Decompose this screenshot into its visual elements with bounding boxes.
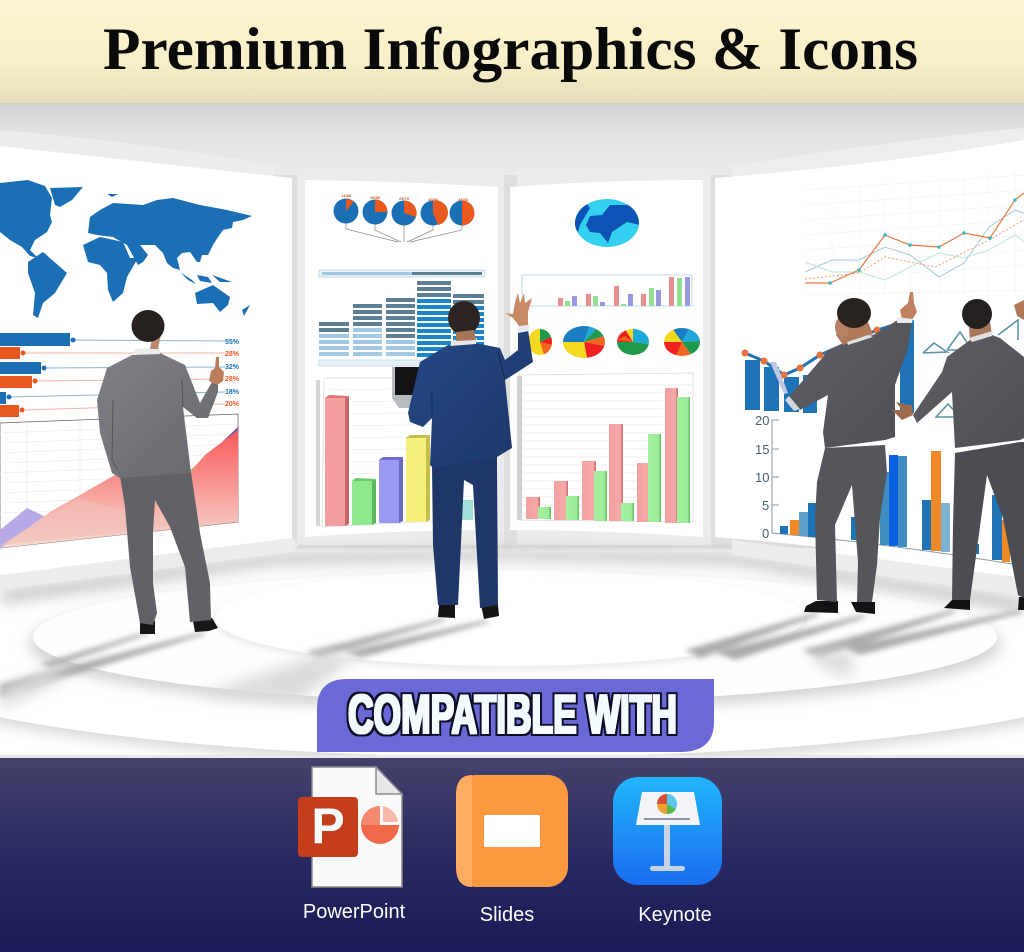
panel: pie row and stacked bars [305, 180, 498, 537]
compatible with banner [317, 679, 714, 752]
businessman: dark grey suit pointing [770, 292, 917, 614]
grouped column chart with axis: 0 [762, 526, 769, 541]
grouped column chart with axis [755, 413, 1024, 566]
label: PowerPoint: PowerPoint [303, 901, 406, 923]
icon: Keynote [613, 777, 722, 885]
floor shadows [0, 610, 1024, 698]
businessman: navy suit centre [408, 293, 533, 619]
globe [574, 199, 642, 247]
line chart [805, 170, 1024, 295]
label: Keynote: Keynote [638, 904, 712, 926]
horizontal percentage bars: 18% [225, 389, 240, 396]
background wall and floor [0, 103, 1024, 758]
laptop held by businessman [392, 367, 420, 408]
small blue pies: 33/33 [458, 197, 469, 202]
floor platform with rings and shadows [0, 533, 1024, 763]
grouped column chart with axis: 5 [762, 498, 769, 513]
grouped column chart with axis: 15 [755, 442, 769, 457]
stacked strips chart [319, 270, 485, 366]
label: Slides: Slides [480, 904, 534, 926]
small blue pies: 29/75 [399, 196, 410, 201]
small blue pies [334, 193, 474, 242]
horizontal percentage bars: 28% [225, 376, 240, 383]
businessman: grey suit left [97, 310, 224, 634]
icon: PowerPoint: P [311, 798, 345, 854]
3D bar chart [316, 378, 490, 527]
coloured pie charts [528, 325, 700, 358]
area chart [0, 414, 238, 548]
panel: world map and bars [0, 146, 298, 590]
horizontal percentage bars: 55% [225, 339, 240, 346]
small blue pies: 10/50 [428, 197, 439, 202]
horizontal percentage bars: 32% [225, 364, 240, 371]
world map [0, 180, 252, 318]
compatibility footer band [0, 755, 1024, 952]
grouped column chart with axis: 10 [755, 470, 769, 485]
banner text: COMPATIBLE WITH [348, 683, 677, 745]
icon: PowerPoint [298, 767, 402, 887]
red and green 3D bars [517, 373, 693, 523]
panel: line and bar charts [715, 140, 1024, 596]
horizontal percentage bars [0, 333, 240, 417]
businessman: dark grey suit right [892, 299, 1024, 610]
small grouped bar chart [522, 275, 692, 306]
icon: Slides [456, 775, 568, 887]
blue column chart with orange line [742, 320, 1018, 417]
header banner [0, 0, 1024, 103]
horizontal percentage bars: 28% [225, 351, 240, 358]
title: Premium Infographics & Icons [103, 16, 918, 82]
horizontal percentage bars: 20% [225, 401, 240, 408]
grouped column chart with axis: 20 [755, 413, 769, 428]
panel: globe, pies and green red bars [510, 180, 703, 537]
small blue pies: 11/88 [341, 193, 352, 198]
small blue pies: 25/88 [370, 195, 381, 200]
